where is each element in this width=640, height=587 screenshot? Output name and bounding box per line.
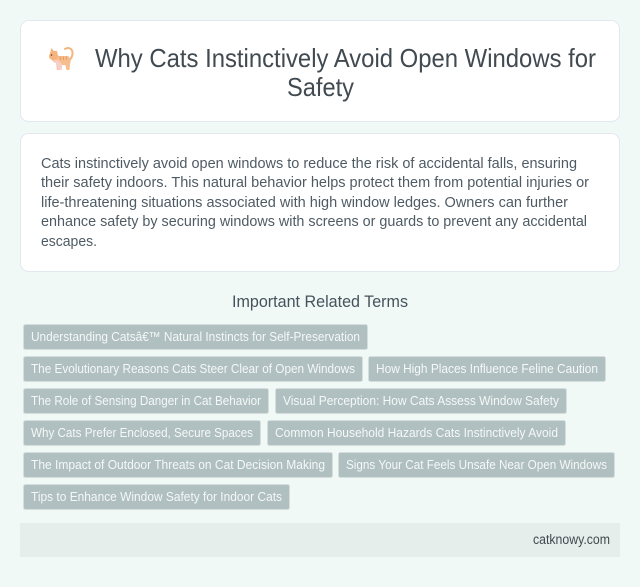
tag — [268, 420, 566, 446]
icon: cat — [49, 48, 73, 70]
heading: related terms: Important Related Terms — [232, 292, 408, 311]
tag: Common Household Hazards Cats Instinctively Avoid — [275, 425, 558, 440]
text block: description: their safety indoors. This natural behavior helps protect them from potential injuries or — [41, 174, 589, 191]
tag — [24, 324, 368, 350]
footer — [20, 523, 620, 557]
title: Safety — [287, 74, 354, 102]
tag — [24, 388, 268, 414]
panel: title card — [20, 20, 620, 122]
text block: description: escapes. — [41, 233, 97, 250]
title: Why Cats Instinctively Avoid Open Windows for — [95, 45, 596, 73]
tag: Why Cats Prefer Enclosed, Secure Spaces — [31, 425, 253, 440]
tag — [276, 388, 566, 414]
tag — [24, 356, 362, 382]
tag — [338, 452, 614, 478]
tag — [24, 484, 290, 510]
tag: Tips to Enhance Window Safety for Indoor Cats — [31, 489, 282, 504]
tag: Understanding Catsâ€™ Natural Instincts for Self-Preservation — [31, 329, 360, 344]
title — [95, 45, 596, 102]
text block: description: Cats instinctively avoid open windows to reduce the risk of accidental falls, ensuring — [41, 155, 577, 172]
tag list — [24, 324, 614, 510]
tag: The Impact of Outdoor Threats on Cat Decision Making — [31, 457, 325, 472]
footer: catknowy.com — [533, 532, 610, 547]
text block: description — [41, 155, 589, 250]
panel: description — [20, 134, 620, 272]
text block: description: life-threatening situations associated with high window ledges. Owners can further — [41, 194, 568, 211]
text block: description: enhance safety by securing windows with screens or guards to prevent any accidental — [41, 213, 587, 230]
tag: How High Places Influence Feline Caution — [376, 361, 598, 376]
tag: The Evolutionary Reasons Cats Steer Clear of Open Windows — [31, 361, 355, 376]
tag — [24, 420, 260, 446]
tag: Signs Your Cat Feels Unsafe Near Open Windows — [346, 457, 607, 472]
tag: Visual Perception: How Cats Assess Window Safety — [283, 393, 560, 408]
tag — [368, 356, 606, 382]
tag: The Role of Sensing Danger in Cat Behavior — [31, 393, 262, 408]
tag — [24, 452, 332, 478]
